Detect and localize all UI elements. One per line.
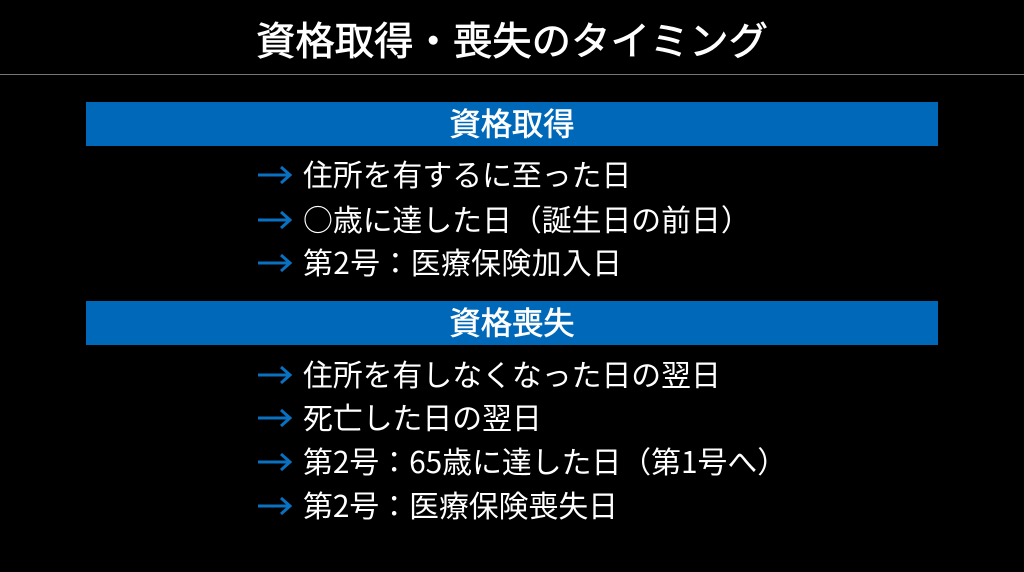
list item: medical insurance loss: 第2号：医療保険喪失日 <box>303 482 618 526</box>
list item: age: ○歳に達した日（誕生日の前日） <box>303 196 751 240</box>
list item: death: 死亡した日の翌日 <box>303 394 542 438</box>
title: 資格取得・喪失のタイミング <box>256 10 768 67</box>
heading: qualification acquisition: 資格取得 <box>449 100 575 145</box>
heading: qualification loss: 資格喪失 <box>449 299 575 344</box>
heading: qualification loss <box>86 301 938 345</box>
list item: medical insurance join: 第2号：医療保険加入日 <box>303 239 622 283</box>
list item: address: 住所を有するに至った日 <box>303 151 631 195</box>
list item: address lost: 住所を有しなくなった日の翌日 <box>303 351 721 395</box>
heading: qualification acquisition <box>86 102 938 146</box>
list item: age 65: 第2号：65歳に達した日（第1号へ） <box>303 438 787 482</box>
